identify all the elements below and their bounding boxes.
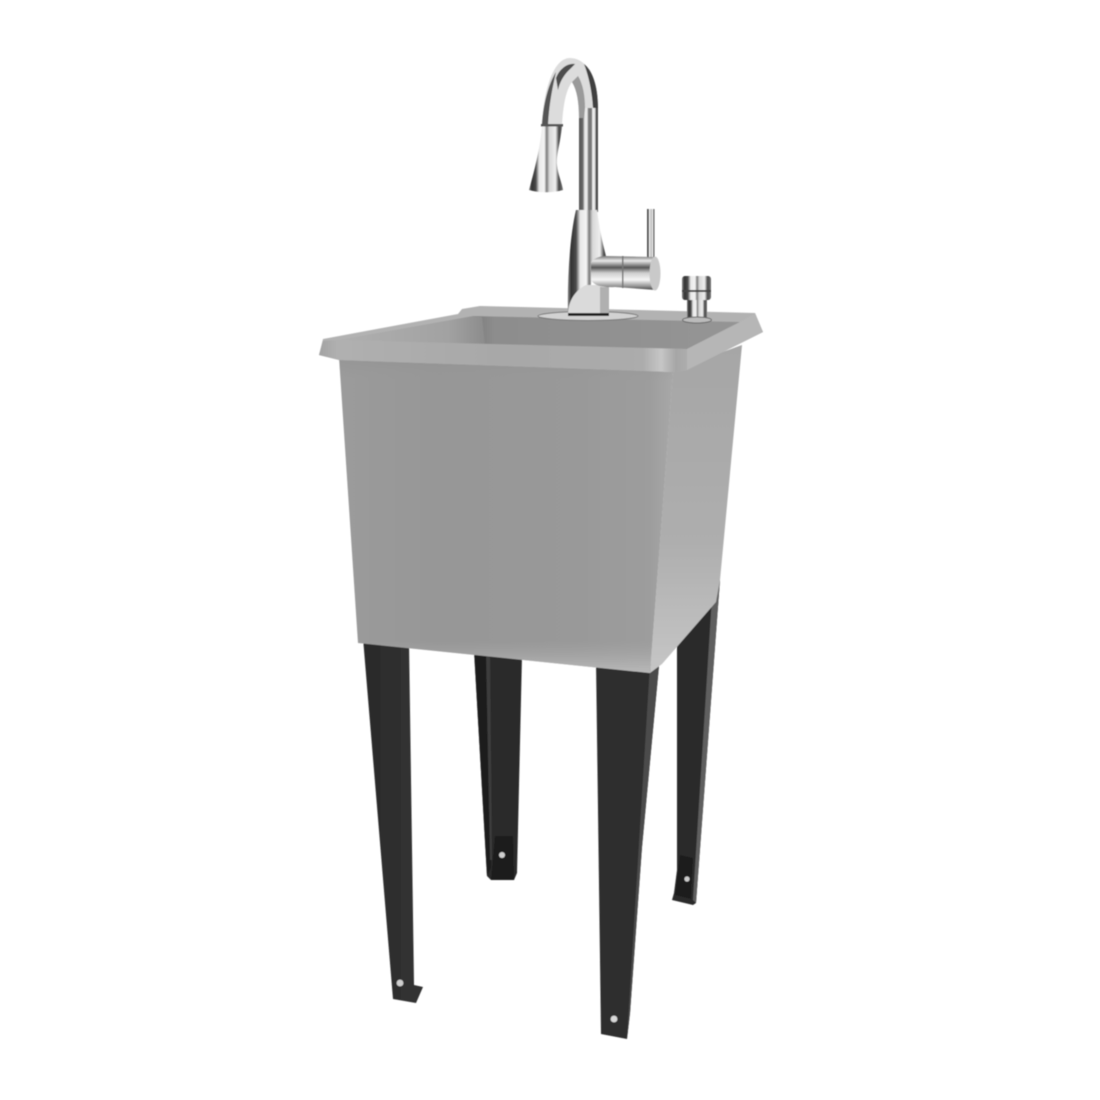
outer rim top [319, 306, 763, 372]
arc highlight inner right [572, 76, 585, 118]
basin back wall [473, 316, 740, 349]
back middle leg [474, 650, 522, 880]
front right corner leg [596, 655, 660, 1039]
faucet base column [568, 210, 609, 315]
mixer section groove [622, 256, 624, 288]
front face of tub [339, 357, 673, 673]
back right leg [672, 580, 720, 905]
mixer handle stem [647, 209, 654, 258]
faucet deck plate [538, 312, 638, 320]
chrome faucet [529, 58, 712, 323]
straight riser chrome [579, 108, 598, 212]
arc shadow outer left [542, 72, 556, 126]
sink rim and basin [319, 306, 763, 372]
sink photo group [319, 58, 763, 1039]
sink tub body [339, 345, 742, 673]
base lower collar [568, 285, 601, 315]
spray head collar [541, 124, 563, 126]
arc shadow right [584, 64, 598, 108]
mixer end cap [650, 256, 660, 290]
right rim band [687, 313, 763, 370]
pull-down spray head [529, 126, 563, 192]
horizontal mixer body [591, 256, 656, 290]
basin left wall [338, 316, 485, 345]
arc shadow top [556, 64, 575, 90]
gooseneck spout [542, 58, 598, 212]
front rim band [319, 340, 687, 372]
front left leg [363, 638, 423, 1003]
soap dispenser [682, 276, 712, 323]
right face of tub [650, 345, 742, 673]
